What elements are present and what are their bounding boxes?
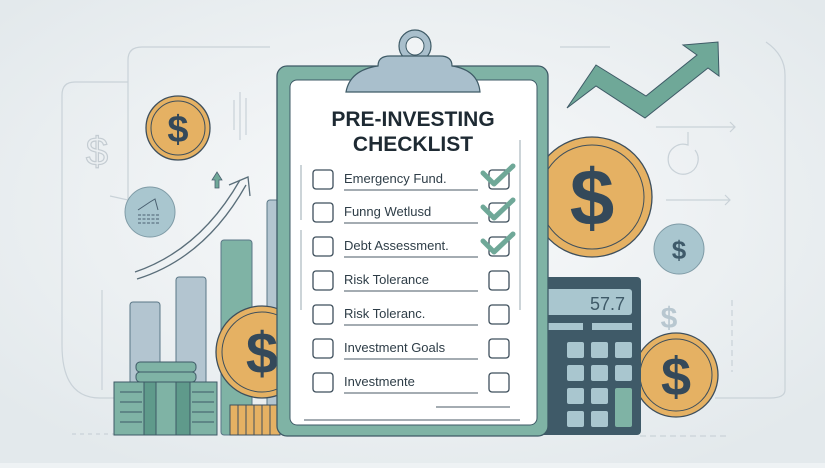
- checklist items: Investment Goals: [344, 340, 446, 355]
- icon: small blue coin right: [654, 224, 704, 274]
- icon: big coin right: $: [570, 153, 614, 242]
- icon: coin bottom right: [634, 333, 718, 417]
- arrow: curved growth arrow: [135, 177, 250, 279]
- checklist items: Investmente: [344, 374, 415, 389]
- icon: clip: [346, 30, 480, 92]
- icon: small up arrow: [212, 172, 222, 188]
- icon: gold coin top left: $: [167, 109, 189, 151]
- panel: clipboard: [277, 30, 548, 436]
- bar chart left: [130, 200, 279, 435]
- icon: calculator: 57.7: [590, 294, 625, 314]
- icon: coin bottom right: $: [661, 347, 691, 407]
- icon: big coin left behind clipboard: [216, 306, 308, 398]
- icon: big coin left behind clipboard: $: [246, 321, 278, 386]
- icon: big coin right: [532, 137, 652, 257]
- icon: faint dollar right: $: [661, 302, 678, 335]
- title: PRE-INVESTING: [331, 108, 495, 131]
- icon: green zigzag arrow: [567, 42, 719, 118]
- decorative background frame lines: [62, 42, 785, 436]
- icon: small blue coin right: $: [672, 235, 687, 265]
- icon: money stack: [114, 362, 217, 435]
- checklist items: Risk Toleranc.: [344, 306, 425, 321]
- checklist items: [301, 140, 520, 420]
- icon: faint dollar left: $: [86, 130, 108, 174]
- title: [331, 108, 495, 156]
- icon: calculator: [540, 277, 641, 435]
- icon: blue chart coin: [125, 187, 175, 237]
- icon: coin stack: [230, 405, 280, 435]
- checklist items: Funng Wetlusd: [344, 204, 431, 219]
- checklist items: Emergency Fund.: [344, 171, 447, 186]
- icon: checkmarks: [483, 166, 513, 252]
- checklist items: Debt Assessment.: [344, 238, 449, 253]
- checklist items: Risk Tolerance: [344, 272, 429, 287]
- title: CHECKLIST: [353, 133, 473, 156]
- icon: gold coin top left: [146, 96, 210, 160]
